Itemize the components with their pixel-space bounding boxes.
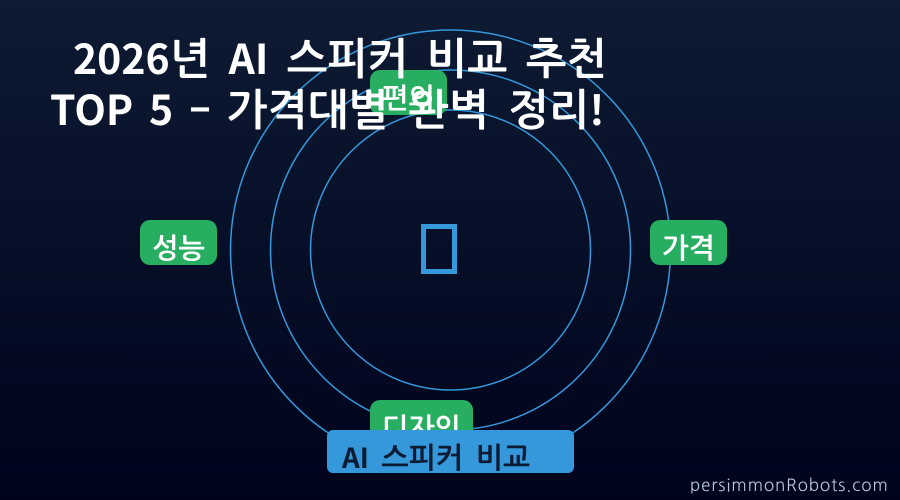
center icon: missing glyph box	[421, 224, 457, 274]
title line 2: TOP 5 – 가격대별 완벽 정리!	[50, 77, 604, 137]
title line 1: 2026년 AI 스피커 비교 추천	[73, 26, 607, 86]
pill: 가격	[650, 220, 727, 265]
pill: 디자인	[370, 400, 473, 445]
pill: 편의: 편의	[382, 84, 435, 112]
pill: 가격: 가격	[662, 234, 715, 262]
pill: 성능	[140, 220, 217, 265]
pill: 편의	[370, 70, 447, 115]
bottom banner: AI 스피커 비교	[327, 430, 574, 473]
watermark: persimmonRobots.com	[690, 477, 889, 494]
pill: 성능: 성능	[152, 234, 205, 262]
pill: 디자인: 디자인	[382, 414, 461, 442]
